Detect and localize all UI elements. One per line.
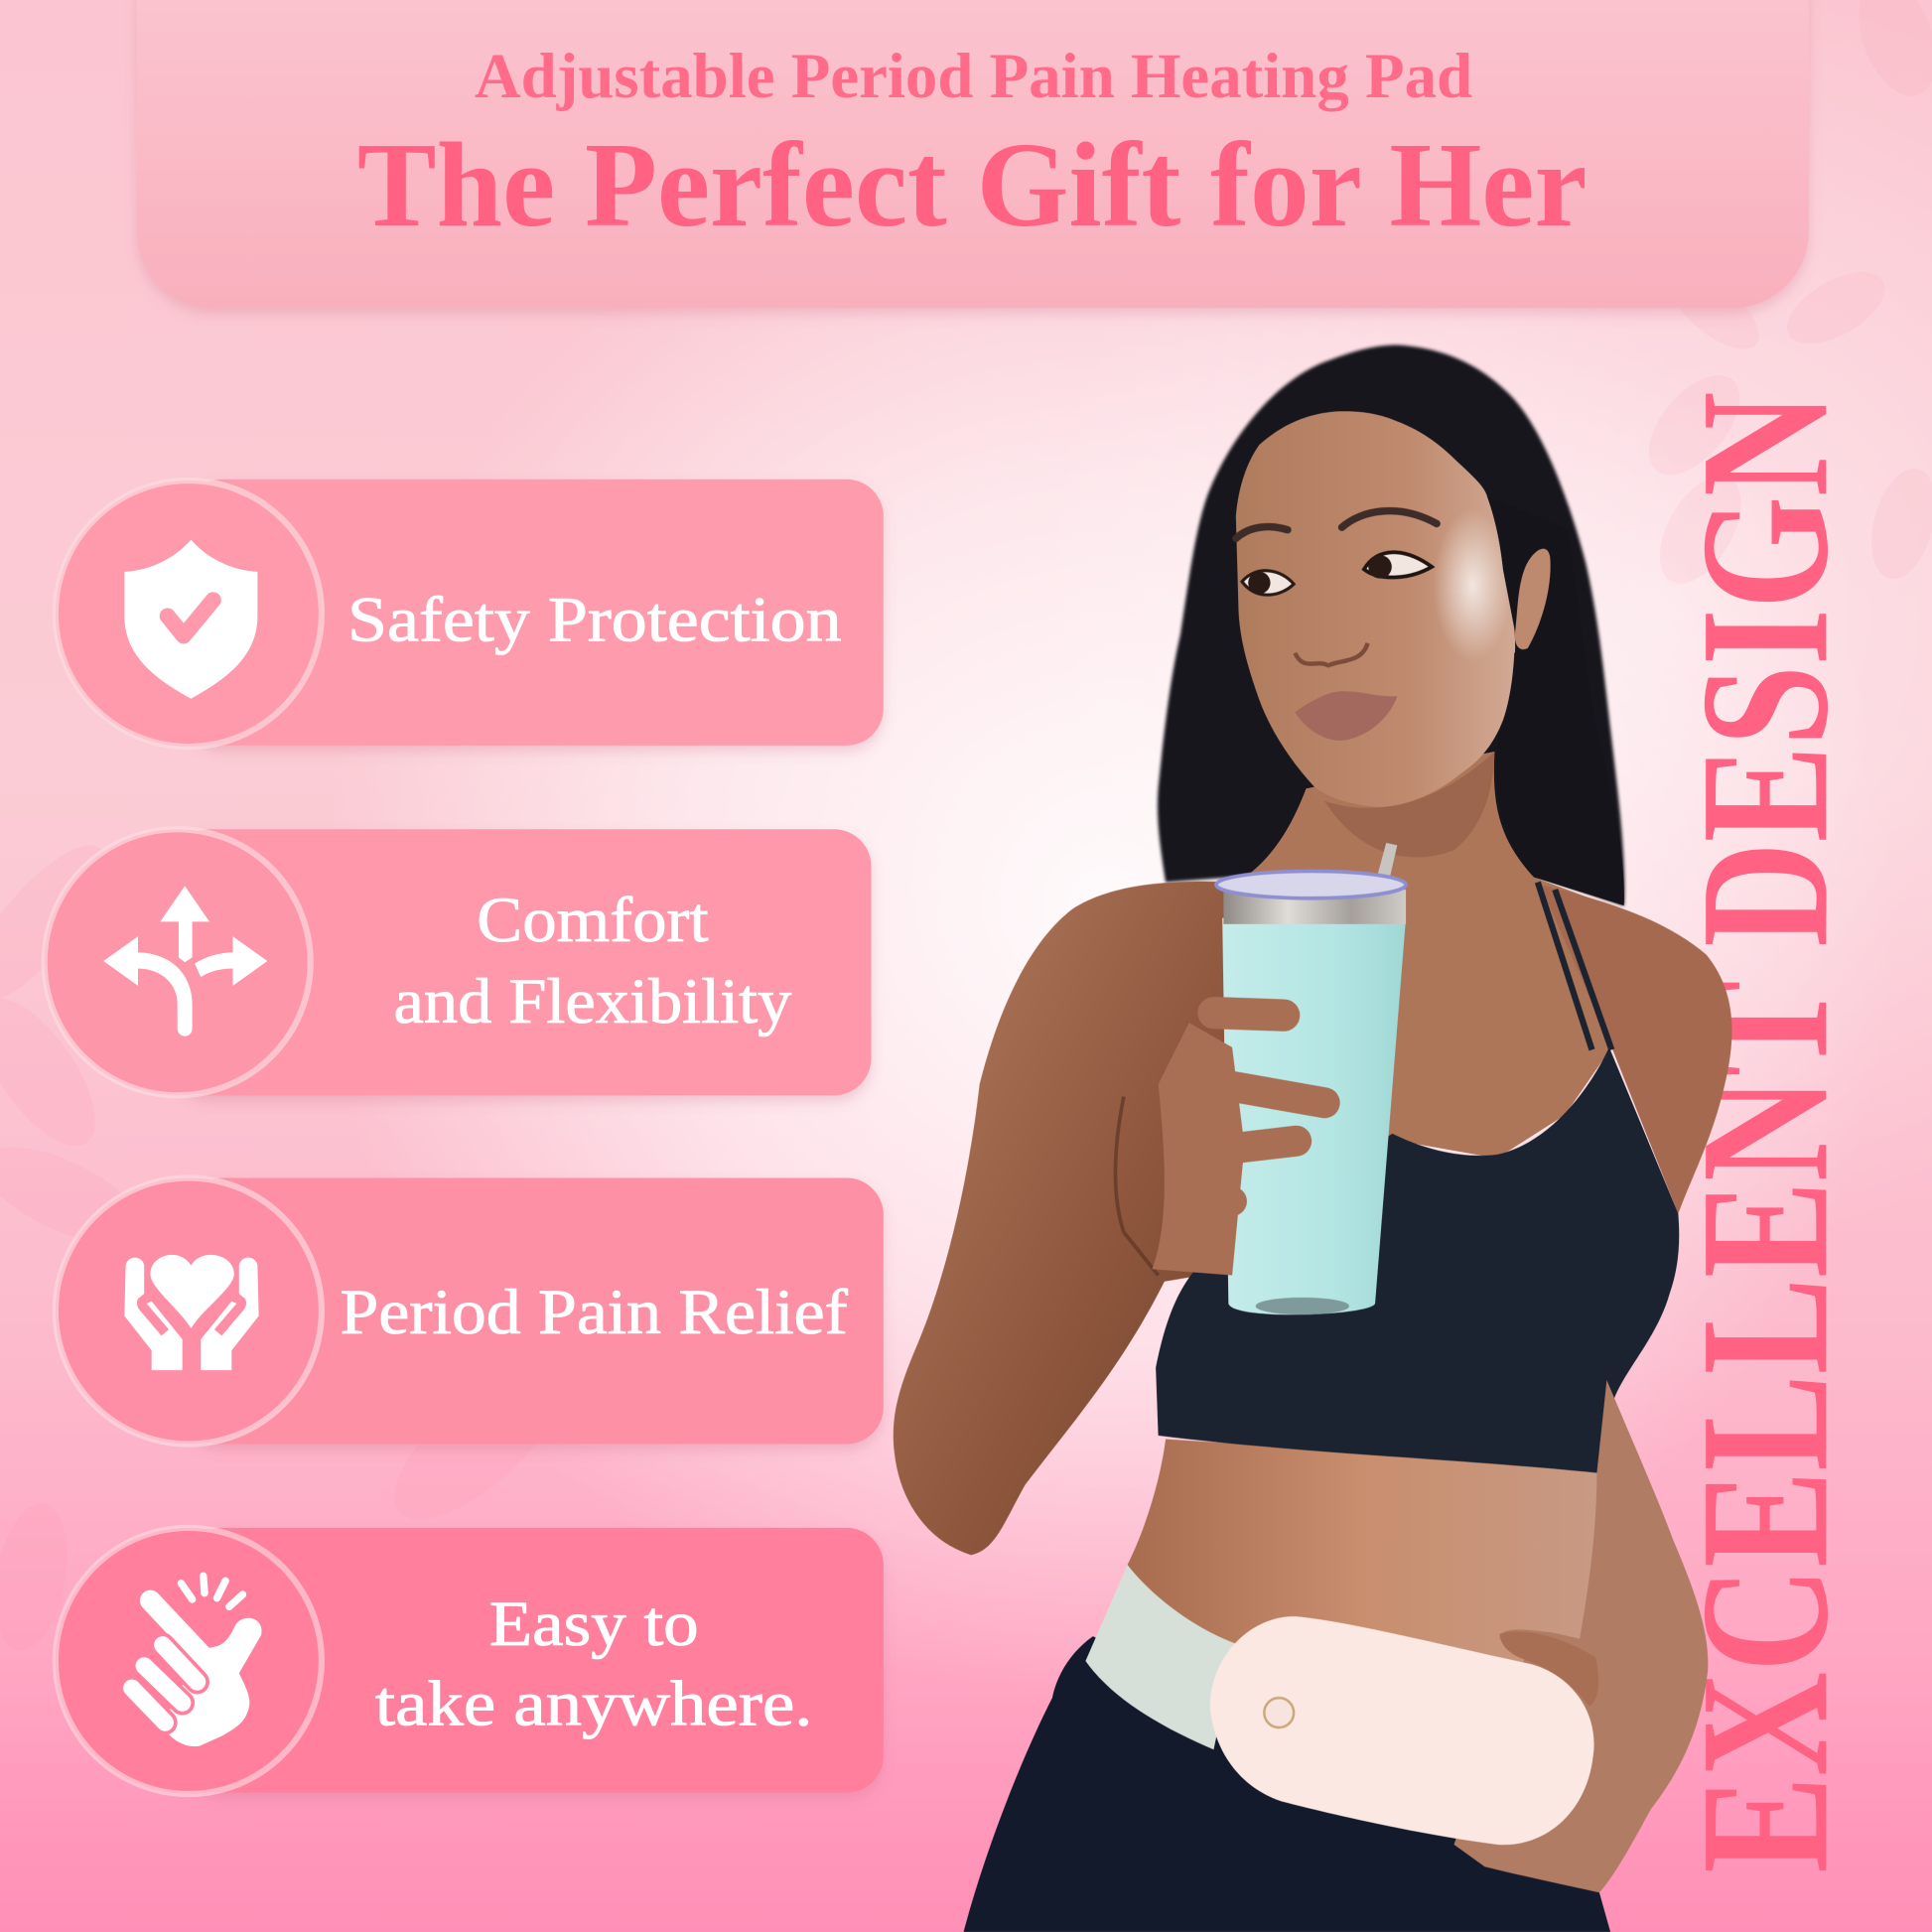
bra straps [1538, 883, 1611, 1049]
main title: The Perfect Gift for Her [357, 119, 1587, 252]
eye left [1242, 571, 1294, 595]
front hair strands [1487, 496, 1624, 905]
nose [1295, 643, 1368, 665]
decorative foliage: top right [1631, 0, 1932, 597]
panel: easy to take anywhere [56, 1528, 884, 1794]
arm inner shadow [1115, 1097, 1159, 1276]
decorative foliage: lower left [0, 826, 581, 1708]
leggings [964, 1636, 1610, 1932]
power button [1264, 1698, 1294, 1727]
label: Period Pain Relief [341, 1276, 848, 1347]
neck and chest [1182, 752, 1626, 1244]
hand holding tumbler [1152, 1013, 1324, 1276]
icon: hands holding heart [124, 1255, 259, 1370]
tumbler [1216, 843, 1406, 1314]
panel: period pain relief [56, 1177, 884, 1445]
ear [1515, 549, 1551, 649]
abdomen [1128, 1440, 1606, 1749]
header panel [137, 0, 1809, 308]
eye right [1364, 552, 1432, 579]
lips [1295, 691, 1397, 741]
eyebrows [1236, 511, 1437, 538]
arm left [894, 882, 1238, 1555]
icon: finger snap [132, 1576, 262, 1746]
heating pad [1210, 1616, 1594, 1845]
vertical heading: EXCELLENT DESIGN [1662, 392, 1865, 1872]
label line 2: take anywhere. [375, 1667, 812, 1738]
panel: comfort and flexibility [45, 829, 871, 1095]
face [1236, 411, 1548, 807]
label: Easy to [489, 1587, 699, 1659]
label line 2: and Flexibility [394, 965, 791, 1036]
icon: arrows [103, 886, 267, 1036]
sports bra [1156, 1047, 1679, 1473]
label: Comfort [477, 884, 709, 955]
shoulder and arm right [1540, 885, 1731, 1213]
neck shadow [1324, 752, 1494, 857]
hair back [1158, 345, 1624, 905]
panel: safety protection [56, 480, 884, 747]
thumb over the heating pad [1499, 1631, 1598, 1707]
subtitle: Adjustable Period Pain Heating Pad [475, 40, 1472, 111]
forearm and hand on hip [1453, 1380, 1708, 1892]
photo: woman with tumbler and heating pad [894, 345, 1731, 1932]
icon: shield [124, 540, 257, 699]
belt strap [1085, 1565, 1236, 1749]
label: Safety Protection [347, 583, 842, 654]
